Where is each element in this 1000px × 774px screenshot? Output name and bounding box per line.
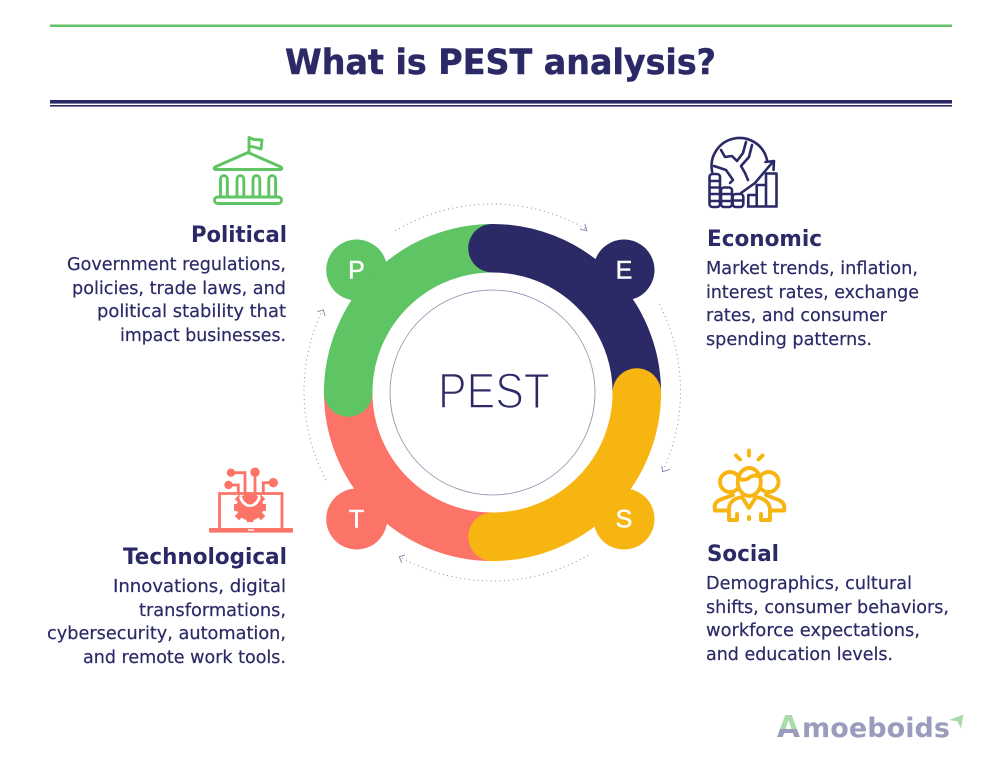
heading: Economic: Economic: [707, 227, 822, 252]
text block: economic description: interest rates, exchange: [706, 283, 919, 303]
header rule: navy double: [50, 100, 952, 107]
text block: social description: and education levels.: [706, 645, 893, 665]
text block: economic description: [706, 259, 919, 350]
center circle: [390, 290, 595, 495]
node circles: [326, 240, 654, 550]
text block: social description: Demographics, cultural: [706, 574, 912, 594]
text block: technological description: Innovations, digital: [113, 577, 286, 597]
icon: group of people: [715, 450, 784, 520]
icon: globe, coins and growth chart: [710, 138, 776, 207]
text block: social description: [706, 574, 949, 665]
logo: Amoeboids: moeboids: [802, 713, 950, 744]
center label: PEST: PEST: [438, 363, 550, 419]
text block: technological description: and remote work tools.: [83, 648, 286, 668]
panel: technological: [47, 468, 293, 668]
text block: technological description: [47, 577, 286, 668]
text block: economic description: Market trends, inflation,: [706, 259, 918, 279]
letter T: T: [349, 506, 364, 534]
heading: Technological: Technological: [123, 545, 287, 570]
title: What is PEST analysis?: [285, 43, 716, 83]
text block: political description: [67, 255, 286, 346]
panel: social: [706, 450, 949, 665]
text block: economic description: rates, and consumer: [706, 306, 888, 326]
text block: technological description: cybersecurity, automation,: [47, 624, 286, 644]
text block: political description: Government regulations,: [67, 255, 286, 275]
dotted cycle arrows: [304, 204, 680, 581]
ring segments: [348, 248, 637, 537]
header rule: green: [50, 24, 952, 27]
letter P: P: [348, 256, 365, 284]
panel: economic: [706, 138, 919, 350]
icon: laptop with gear and circuit: [209, 468, 293, 533]
chart: PEST cycle ring: [304, 204, 680, 581]
heading: Social: Social: [707, 542, 779, 567]
letter S: S: [616, 506, 632, 534]
icon: government building: [214, 138, 282, 204]
text block: technological description: transformations,: [139, 601, 286, 621]
letter E: E: [616, 256, 632, 284]
text block: political description: policies, trade laws, and: [72, 279, 286, 299]
text block: social description: shifts, consumer behaviors,: [706, 598, 949, 618]
text block: economic description: spending patterns.: [706, 330, 872, 350]
heading: Political: Political: [191, 223, 287, 248]
logo: Amoeboids: A: [777, 710, 801, 745]
panel: political: [67, 138, 287, 346]
text block: political description: impact businesses.: [120, 326, 286, 346]
text block: political description: political stability that: [97, 302, 286, 322]
text block: social description: workforce expectations,: [706, 621, 920, 641]
